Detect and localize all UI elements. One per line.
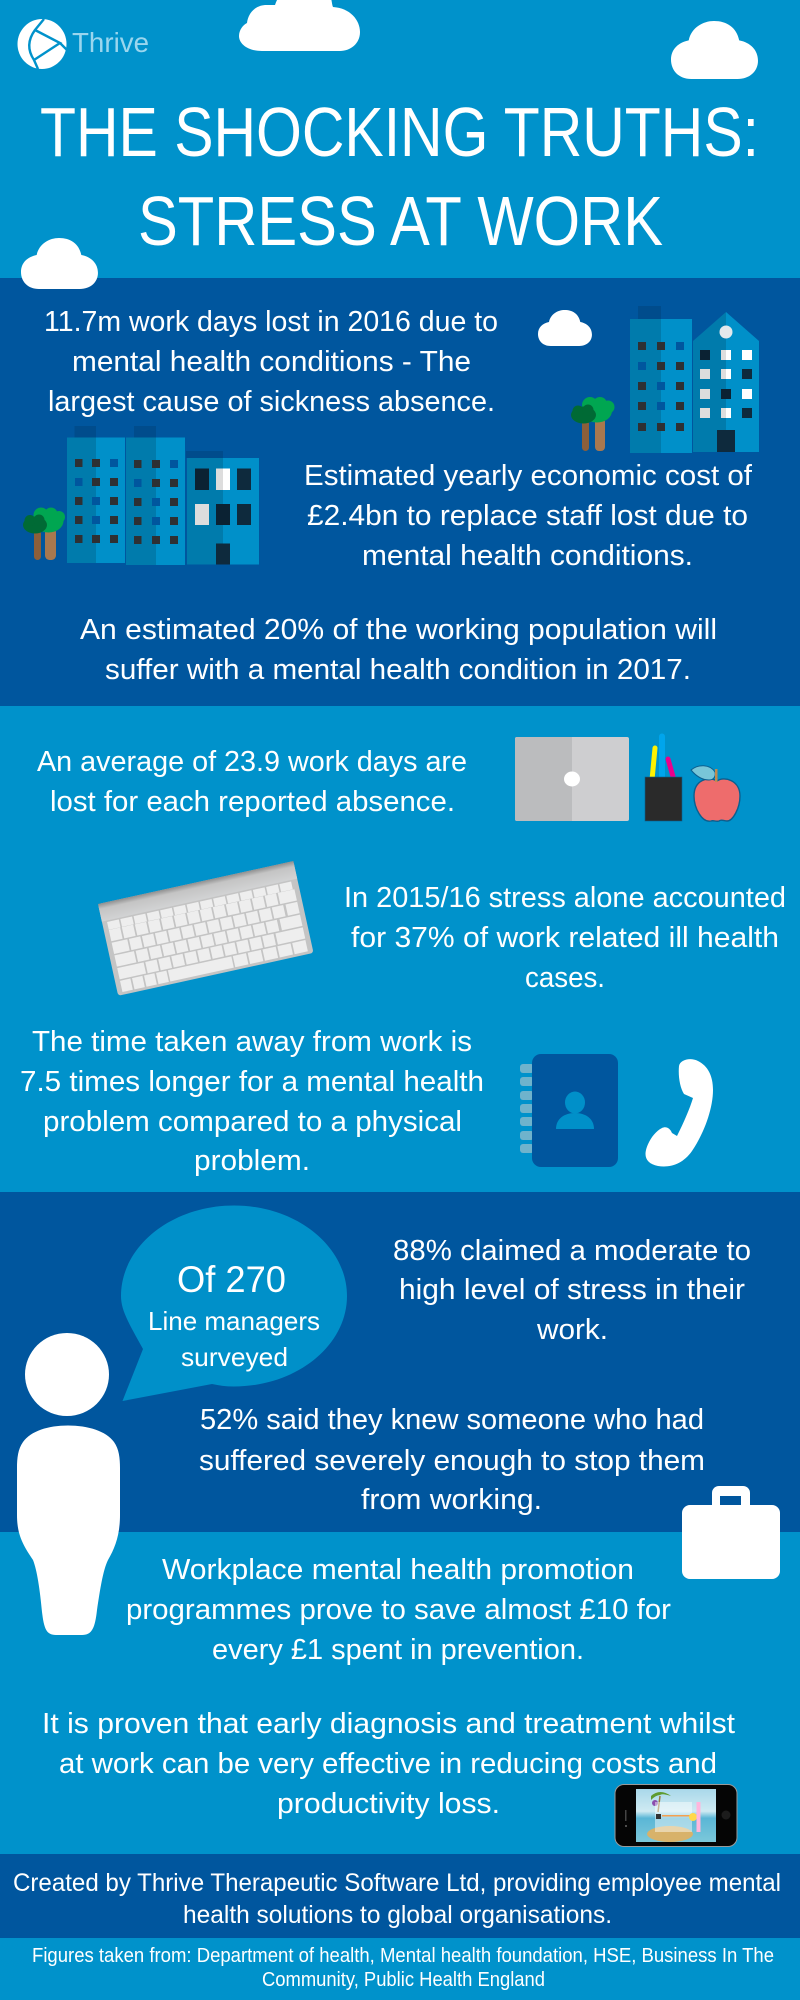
- icon: telephone handset: [646, 1059, 713, 1166]
- icon: cloud top right: [671, 21, 758, 79]
- text: 88 percent claimed: 88% claimed a moderate to: [393, 1235, 751, 1267]
- text: 2015/16 stress: [344, 882, 786, 994]
- text: time taken away: 7.5 times longer for a mental health: [20, 1066, 484, 1098]
- text: 88 percent claimed: work.: [536, 1314, 608, 1346]
- text: created by Thrive: Created by Thrive Therapeutic Software Ltd, providing employee mental: [13, 1869, 781, 1897]
- icon: contact book: [520, 1054, 618, 1167]
- text: created by Thrive: health solutions to global organisations.: [183, 1901, 612, 1929]
- text: early diagnosis: [42, 1708, 735, 1820]
- icon: smartphone showing app: [615, 1784, 737, 1846]
- text: average of 23.9 work days: [37, 746, 467, 818]
- text: 2015/16 stress: for 37% of work related ill health: [351, 922, 779, 954]
- icon: briefcase: [682, 1486, 780, 1579]
- text: time taken away: problem.: [194, 1145, 310, 1177]
- background band: header: [0, 0, 800, 278]
- text: time taken away: [20, 1026, 484, 1177]
- text: time taken away: The time taken away from work is: [32, 1026, 472, 1058]
- icon: trees and buildings right: [571, 306, 759, 453]
- text: 88 percent claimed: high level of stress in their: [399, 1274, 745, 1306]
- text: 52 percent said: from working.: [361, 1484, 542, 1516]
- background band: sources panel: [0, 1938, 800, 2000]
- text: estimated 20 percent: An estimated 20% of the working population will: [80, 614, 717, 646]
- icon: cloud top centre: [239, 0, 360, 51]
- text: 11.7m work days lost: mental health conditions - The: [72, 346, 471, 378]
- icon: apple: [691, 766, 740, 821]
- text: workplace mental health promotion: programmes prove to save almost £10 for: [126, 1594, 671, 1626]
- text: estimated yearly economic cost: [304, 460, 753, 572]
- text: 11.7m work days lost: 11.7m work days lost in 2016 due to: [44, 306, 498, 338]
- text: of 270 line managers surveyed: Of 270: [177, 1259, 286, 1300]
- text: 52 percent said: suffered severely enough to stop them: [199, 1445, 705, 1477]
- text: workplace mental health promotion: Workplace mental health promotion: [162, 1554, 634, 1586]
- logo: Thrive: Thrive: [72, 27, 149, 58]
- text: of 270 line managers surveyed: Line managers: [148, 1306, 320, 1336]
- text: early diagnosis: It is proven that early diagnosis and treatment whilst: [42, 1708, 735, 1740]
- background band: line manager survey panel: [0, 1192, 800, 1532]
- text: 52 percent said: 52% said they knew someone who had: [200, 1404, 704, 1436]
- text: average of 23.9 work days: An average of 23.9 work days are: [37, 746, 467, 778]
- text: workplace mental health promotion: every £1 spent in prevention.: [212, 1634, 584, 1666]
- background band: dark statistics panel: [0, 278, 800, 706]
- speech bubble: [121, 1206, 347, 1401]
- text: 11.7m work days lost: [44, 306, 498, 418]
- title: [40, 93, 759, 260]
- text: estimated yearly economic cost: Estimated yearly economic cost of: [304, 460, 753, 492]
- text: created by Thrive: [13, 1869, 781, 1929]
- text: estimated 20 percent: suffer with a mental health condition in 2017.: [105, 654, 691, 686]
- text: time taken away: problem compared to a physical: [43, 1106, 462, 1138]
- title: STRESS AT WORK: [138, 182, 663, 260]
- background band: light statistics panel: [0, 706, 800, 1192]
- text: of 270 line managers surveyed: surveyed: [181, 1342, 288, 1372]
- text: 2015/16 stress: cases.: [525, 962, 605, 994]
- text: early diagnosis: productivity loss.: [277, 1788, 500, 1820]
- text: of 270 line managers surveyed: [148, 1259, 320, 1372]
- icon: small cloud: [538, 310, 592, 346]
- text: sources: [32, 1945, 774, 1991]
- background band: credit panel: [0, 1854, 800, 1938]
- logo: Thrive: [18, 19, 149, 69]
- text: sources: Community, Public Health England: [262, 1969, 545, 1991]
- text: 2015/16 stress: In 2015/16 stress alone accounted: [344, 882, 786, 914]
- text: workplace mental health promotion: [126, 1554, 671, 1666]
- icon: pen pot: [645, 736, 682, 821]
- icon: cloud left: [21, 238, 98, 289]
- background band: prevention panel: [0, 1532, 800, 1854]
- text: estimated yearly economic cost: £2.4bn to replace staff lost due to: [307, 500, 748, 532]
- text: 88 percent claimed: [393, 1235, 751, 1346]
- text: estimated 20 percent: [80, 614, 717, 686]
- icon: person silhouette: [17, 1333, 120, 1635]
- icon: laptop: [515, 737, 629, 821]
- text: early diagnosis: at work can be very effective in reducing costs and: [59, 1748, 717, 1780]
- icon: trees and buildings left: [23, 426, 259, 565]
- text: 52 percent said: [199, 1404, 705, 1516]
- icon: keyboard: [98, 861, 314, 996]
- text: average of 23.9 work days: lost for each reported absence.: [50, 786, 455, 818]
- text: 11.7m work days lost: largest cause of sickness absence.: [48, 386, 495, 418]
- text: estimated yearly economic cost: mental health conditions.: [362, 540, 693, 572]
